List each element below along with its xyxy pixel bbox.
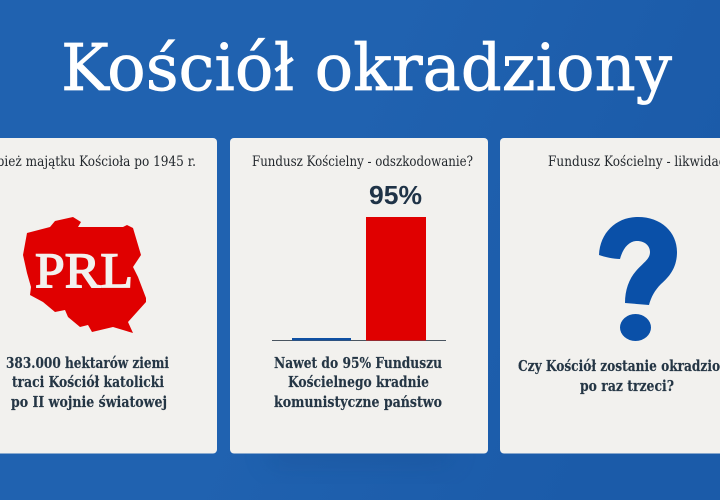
panel text: nawet do 95%: Nawet do 95% Funduszu (274, 355, 442, 372)
panel: likwidacja (500, 138, 720, 454)
panel text: 383.000 hektarów: 383.000 hektarów ziemi (6, 355, 169, 372)
panel: odszkodowanie (230, 138, 488, 454)
bar chart (272, 180, 446, 341)
panel text: czy kościół (518, 358, 720, 395)
panel text: 383.000 hektarów (6, 355, 169, 411)
panel text: 383.000 hektarów: traci Kościół katolicki (12, 374, 164, 391)
icon: map of Poland with PRL (23, 217, 146, 333)
icon: map of Poland with PRL: PRL (35, 242, 133, 298)
title: Kościół okradziony (61, 31, 672, 106)
panel text: czy kościół: po raz trzeci? (580, 378, 674, 395)
panel: grabież majątku (0, 138, 217, 454)
panel text: nawet do 95% (274, 355, 442, 411)
icon: question mark (599, 217, 677, 341)
bar value label: 95% (369, 180, 422, 210)
panel text: nawet do 95%: Kościelnego kradnie (288, 374, 429, 391)
panel heading: odszkodowanie: Fundusz Kościelny - odszkodowanie? (252, 154, 473, 170)
panel text: 383.000 hektarów: po II wojnie światowej (11, 394, 167, 411)
panel text: nawet do 95%: komunistyczne państwo (274, 394, 442, 411)
